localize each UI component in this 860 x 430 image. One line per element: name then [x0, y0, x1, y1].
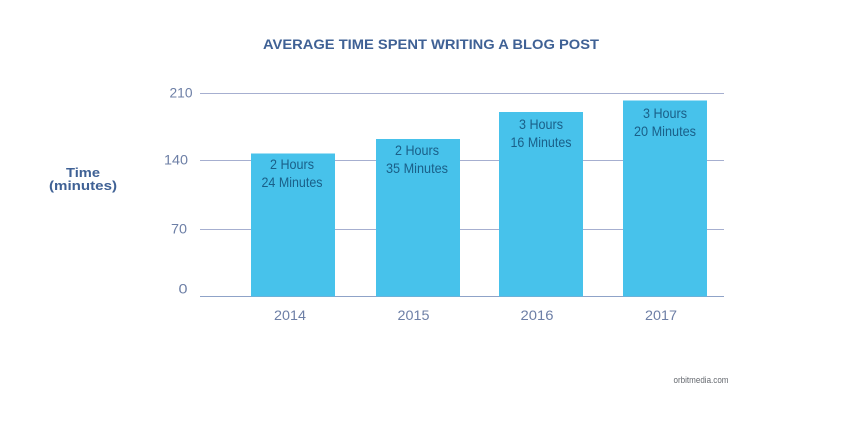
bar 2014 — [251, 154, 335, 296]
bar 2014: 24 Minutes — [262, 174, 322, 190]
x axis labels — [274, 307, 677, 323]
bar 2017: 20 Minutes — [634, 123, 696, 139]
y axis labels: 70 — [171, 220, 187, 236]
bar 2015: 35 Minutes — [386, 160, 448, 176]
bar 2016: 16 Minutes — [510, 134, 572, 150]
x axis labels: 2014 — [274, 307, 306, 323]
bar 2016 — [499, 112, 583, 296]
x axis labels: 2017 — [645, 307, 677, 323]
y axis labels: 0 — [178, 280, 188, 296]
x axis labels: 2015 — [398, 307, 430, 323]
source credit: orbitmedia.com — [674, 375, 729, 386]
y axis labels: 210 — [170, 84, 193, 100]
y axis title — [49, 165, 117, 193]
bar 2016: 3 Hours — [519, 116, 563, 132]
title: AVERAGE TIME SPENT WRITING A BLOG POST — [263, 37, 600, 52]
bar 2015 — [376, 139, 460, 296]
y axis title: (minutes) — [49, 178, 117, 193]
y axis title: Time — [66, 165, 100, 180]
x axis labels: 2016 — [520, 307, 554, 323]
y axis labels: 140 — [164, 152, 188, 168]
bar 2014: 2 Hours — [270, 156, 314, 172]
bar 2017 — [623, 100, 707, 296]
bar 2017: 3 Hours — [643, 105, 687, 121]
bar 2015: 2 Hours — [395, 142, 439, 158]
y axis labels — [164, 84, 193, 296]
